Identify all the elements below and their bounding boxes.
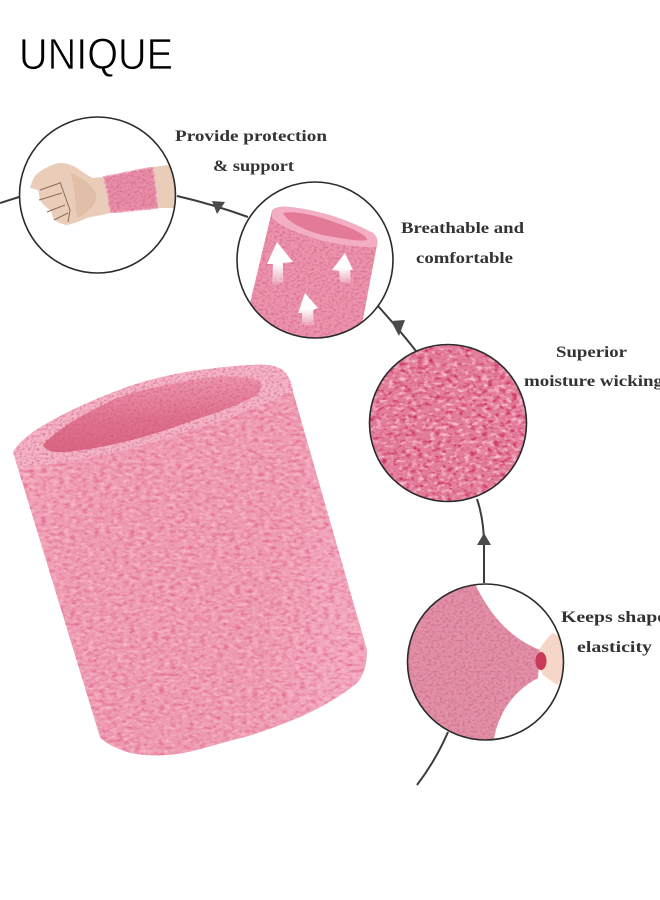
wristband body	[13, 365, 367, 755]
caption: comfortable: comfortable	[416, 250, 513, 267]
stretched fabric	[408, 586, 540, 740]
arrow: toward breathable circle	[391, 320, 405, 336]
small band opening	[283, 212, 367, 241]
caption: superior: Superior	[556, 344, 627, 361]
red fingernail	[536, 652, 546, 670]
line: circle two to circle one	[177, 196, 248, 217]
connecting line with arrows	[0, 196, 484, 785]
shaded back of hand	[70, 172, 96, 218]
caption: elasticity: elasticity	[577, 639, 652, 656]
circle: moisture wicking texture	[370, 344, 526, 502]
finger creases	[39, 182, 70, 222]
white arrow bottom	[298, 293, 318, 325]
main product: pink terry wristband	[13, 365, 367, 755]
logo: UNIQUE: UNIQUE	[19, 30, 173, 79]
small band rim	[272, 207, 377, 247]
line: tail below circle four	[417, 732, 448, 785]
line: entering first circle	[0, 197, 19, 203]
wristband inner opening	[43, 377, 261, 452]
circle: breathable	[237, 182, 393, 345]
white arrow right	[332, 253, 353, 283]
white arrow left	[267, 242, 293, 285]
caption: keeps shape: Keeps shape	[561, 609, 660, 626]
fingers	[539, 633, 563, 685]
caption: provide protection: Provide protection	[175, 128, 327, 145]
line: circle four to circle three	[477, 499, 484, 583]
caption: and support: & support	[213, 158, 295, 175]
small band body	[250, 206, 378, 338]
caption: breathable and: Breathable and	[401, 220, 524, 237]
circle: wrist protection	[20, 117, 177, 273]
caption: moisture wicking: moisture wicking	[524, 373, 660, 390]
arrow: toward moisture circle	[477, 533, 491, 545]
circle: elasticity stretch	[406, 583, 564, 741]
wristband rim	[13, 365, 293, 466]
fist and forearm	[30, 163, 177, 225]
arrow: toward protection circle	[212, 201, 225, 214]
line: circle three to circle two	[378, 306, 416, 351]
worn wristband	[103, 167, 158, 213]
